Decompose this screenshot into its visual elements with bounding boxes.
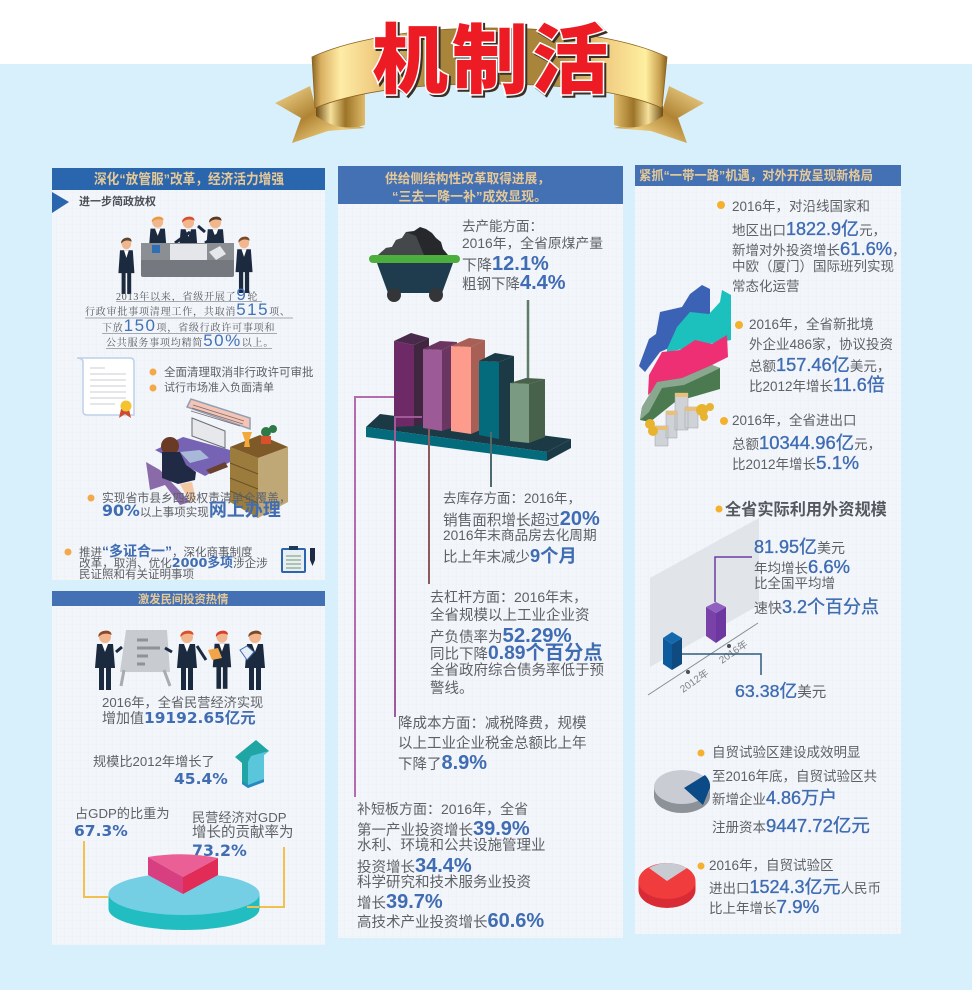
bullet list: [150, 365, 314, 394]
text: exports along the route: [717, 198, 906, 294]
panel heading: 供给侧结构性改革取得进展，: [385, 171, 550, 186]
text: free trade zone trade: [698, 858, 881, 917]
chart: foreign investment columns: [648, 518, 761, 695]
text: added value: [102, 694, 263, 727]
text: 90% online handling: 实现省市县乡四级权责清单全覆盖，: [102, 491, 291, 505]
text: contribution to GDP growth: 73.2%: [192, 841, 247, 860]
text: cost reduction: [398, 715, 586, 774]
text: imports and exports: [720, 412, 881, 474]
text: deleveraging: 去杠杆方面：2016年末，: [430, 589, 587, 605]
text: contribution to GDP growth: 民营经济对GDP: [192, 810, 287, 825]
text: scale growth: 规模比2012年增长了: [93, 754, 215, 769]
panel heading: 激发民间投资热情: [138, 592, 228, 606]
icon: certificate: [77, 358, 134, 418]
panel: 放管服 reform: [52, 168, 325, 581]
panel background: [52, 591, 325, 945]
chart: gray pie: [654, 770, 710, 813]
text: overseas enterprises: [735, 316, 893, 395]
chart: foreign investment columns: 2012年: [677, 666, 711, 695]
text: reform summary: 下放150项，省级行政许可事项和: [102, 316, 275, 335]
text: exports along the route: 常态化运营: [732, 279, 800, 294]
text: 2016 foreign investment: 速快3.2个百分点: [754, 597, 879, 617]
heading: foreign investment scale: 全省实际利用外资规模: [725, 500, 887, 519]
text: reform summary: 行政审批事项清理工作，共取消515项、: [85, 300, 291, 319]
text: scale growth: 45.4%: [174, 770, 228, 788]
text: free trade zone enterprises: [698, 745, 877, 836]
text: destocking: 去库存方面：2016年，: [443, 491, 581, 506]
text: free trade zone trade: 进出口1524.3亿元人民币: [709, 877, 881, 897]
text: added value: 2016年，全省民营经济实现: [102, 694, 263, 710]
text: 2012 foreign investment: 63.38亿美元: [735, 681, 826, 701]
text: 多证合一: 民证照和有关证明事项: [79, 567, 194, 581]
text: reform summary: 2013年以来，省级开展了9轮: [116, 285, 258, 304]
title ribbon: [275, 19, 704, 143]
text: 2016 foreign investment: 81.95亿美元: [754, 537, 845, 557]
icon: coal cart: [369, 227, 460, 302]
text: 2016 foreign investment: 比全国平均增: [754, 575, 835, 591]
text: deleveraging: 产负债率为52.29%: [430, 625, 572, 647]
text: imports and exports: 比2012年增长5.1%: [732, 453, 859, 474]
text: cost reduction: 以上工业企业税金总额比上年: [398, 734, 586, 752]
text: destocking: [443, 491, 600, 566]
text: share of GDP: 67.3%: [74, 822, 128, 840]
text: overseas enterprises: 2016年，全省新批境: [749, 316, 874, 332]
chart: foreign investment columns: 2016年: [716, 637, 750, 666]
text: weak links: 增长39.7%: [357, 891, 443, 913]
left ribbon fold: [316, 92, 365, 128]
text: free trade zone trade: 2016年，自贸试验区: [709, 858, 834, 873]
panel heading: 紧抓“一带一路”机遇，对外开放呈现新格局: [639, 168, 873, 183]
text: free trade zone enterprises: 至2016年底，自贸试验区共: [712, 769, 877, 784]
text: overseas enterprises: 比2012年增长11.6倍: [749, 375, 885, 395]
panel: private investment: [52, 591, 325, 945]
panel background: [52, 168, 325, 580]
text: free trade zone enterprises: 自贸试验区建设成效明显: [712, 745, 860, 760]
text: capacity reduction: 粗钢下降4.4%: [462, 272, 566, 294]
panel heading: 深化“放管服”改革，经济活力增强: [94, 171, 284, 187]
text: scale growth: [93, 754, 228, 788]
panel background: [338, 166, 623, 938]
text: share of GDP: [74, 806, 170, 840]
text: exports along the route: 新增对外投资增长61.6%，: [732, 238, 906, 259]
subheading with triangle: [52, 192, 156, 213]
text: destocking: 销售面积增长超过20%: [443, 508, 600, 530]
bullet list: 试行市场准入负面清单: [164, 380, 274, 394]
text: exports along the route: 中欧（厦门）国际班列实现: [732, 259, 894, 274]
bullet list: 全面清理取消非行政许可审批: [164, 365, 314, 379]
text: exports along the route: 地区出口1822.9亿元，: [732, 219, 886, 239]
subheading with triangle: 进一步简政放权: [79, 194, 156, 208]
text: weak links: 投资增长34.4%: [357, 855, 472, 877]
text: reform summary: [85, 285, 293, 350]
panel heading: [338, 166, 623, 204]
icon: clipboard and pen: [282, 546, 315, 572]
text: 2016 foreign investment: [754, 537, 879, 617]
text: imports and exports: 总额10344.96亿元，: [732, 432, 881, 453]
text: reform summary: 公共服务事项均精简50%以上。: [106, 331, 274, 350]
chart: red pie: [638, 863, 696, 908]
ribbon band: [312, 28, 667, 108]
text: capacity reduction: 2016年，全省原煤产量: [462, 235, 603, 251]
text: weak links: 水利、环境和公共设施管理业: [357, 836, 546, 854]
text: cost reduction: 降成本方面：减税降费，规模: [398, 715, 586, 732]
text: overseas enterprises: 总额157.46亿美元，: [749, 355, 890, 375]
panel background: [635, 165, 901, 934]
left ribbon tail: [275, 86, 365, 143]
text: deleveraging: [430, 589, 604, 697]
3D bar chart: [366, 300, 571, 461]
text: capacity reduction: [462, 219, 603, 294]
3D pie chart: [84, 841, 284, 930]
title text: 机制活: [372, 19, 612, 104]
text: 90% online handling: [88, 491, 291, 520]
text: 多证合一: 改革，取消、优化2000多项涉企涉: [79, 555, 268, 571]
text: 90% online handling: 90%以上事项实现网上办理: [102, 500, 281, 520]
text: deleveraging: 同比下降0.89个百分点: [430, 642, 603, 664]
panel heading: [52, 591, 325, 606]
text: deleveraging: 全省规模以上工业企业资: [430, 606, 590, 624]
text: overseas enterprises: 外企业486家，协议投资: [749, 336, 893, 352]
text: contribution to GDP growth: 增长的贡献率为: [192, 824, 294, 841]
text: weak links: [357, 801, 546, 932]
panel heading: [52, 168, 325, 190]
icon: teal up arrow: [235, 740, 269, 788]
text: destocking: 2016年末商品房去化周期: [443, 528, 597, 543]
text: weak links: 高技术产业投资增长60.6%: [357, 910, 544, 932]
text: free trade zone enterprises: 注册资本9447.72亿元: [712, 815, 870, 836]
text: free trade zone enterprises: 新增企业4.86万户: [712, 788, 837, 808]
illustration: business team with flipchart: [95, 630, 265, 690]
illustration: woman at desk: [146, 399, 288, 518]
text: deleveraging: 全省政府综合债务率低于预: [430, 661, 604, 679]
text: cost reduction: 下降了8.9%: [398, 752, 487, 774]
text: 2016 foreign investment: 年均增长6.6%: [754, 556, 850, 577]
panel: belt and road: [635, 165, 906, 934]
text: 多证合一: 推进“多证合一”，深化商事制度: [79, 543, 253, 559]
text: weak links: 第一产业投资增长39.9%: [357, 818, 530, 840]
panel heading: [635, 165, 901, 186]
text: exports along the route: 2016年，对沿线国家和: [732, 198, 870, 214]
text: destocking: 比上年末减少9个月: [443, 545, 577, 566]
text: weak links: 补短板方面：2016年，全省: [357, 801, 528, 817]
panel: supply-side reform: [338, 166, 623, 938]
text: weak links: 科学研究和技术服务业投资: [357, 874, 531, 891]
text: free trade zone trade: 比上年增长7.9%: [709, 896, 820, 917]
text: contribution to GDP growth: [192, 810, 294, 860]
text: deleveraging: 警线。: [430, 680, 474, 697]
illustration: stacked map with buildings and coins: [639, 285, 731, 446]
panel heading: “三去一降一补”成效显现。: [392, 189, 547, 204]
text: capacity reduction: 去产能方面：: [462, 219, 543, 234]
leader lines from bars to text: [355, 397, 491, 797]
text: 多证合一: [64, 543, 268, 581]
text: added value: 增加值19192.65亿元: [102, 709, 256, 727]
right ribbon fold: [614, 92, 663, 128]
text: share of GDP: 占GDP的比重为: [75, 806, 170, 821]
illustration: meeting around a table: [118, 217, 253, 294]
text: capacity reduction: 下降12.1%: [462, 253, 549, 275]
text: imports and exports: 2016年，全省进出口: [732, 412, 857, 428]
right ribbon tail: [614, 86, 704, 143]
